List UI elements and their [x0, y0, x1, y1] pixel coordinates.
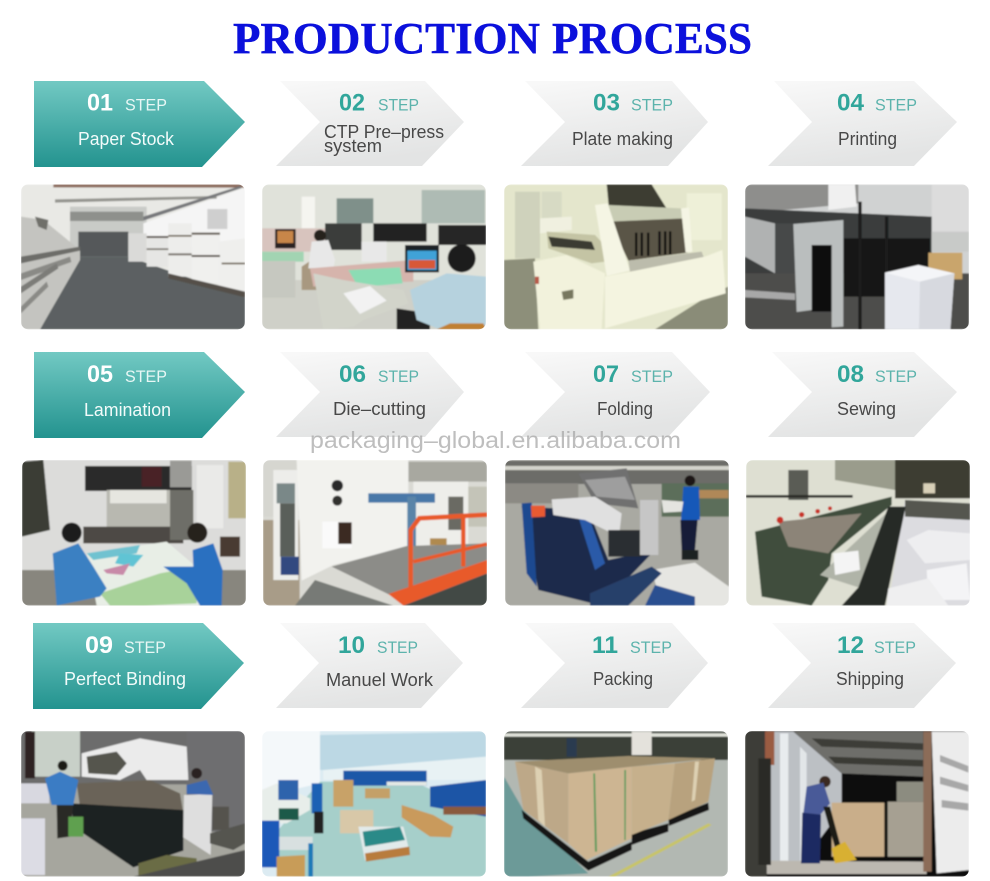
step 08 arrow: STEP	[875, 367, 917, 386]
step 01 arrow: STEP	[125, 96, 167, 114]
step 01 arrow: 01	[87, 90, 113, 116]
photo 02: CTP pre-press room	[262, 184, 486, 329]
step 03 arrow: STEP	[631, 96, 673, 114]
step 04 arrow	[768, 81, 957, 166]
step 01 arrow	[34, 81, 245, 167]
step 10 arrow: Manuel Work	[326, 670, 434, 690]
photo 09: perfect binding	[21, 731, 245, 877]
step 03 arrow	[521, 81, 708, 166]
photo 12: loading container	[745, 731, 969, 877]
step 11 arrow: 11	[592, 632, 618, 659]
photo 07: folding machine	[505, 460, 729, 606]
step 09 arrow: 09	[85, 632, 113, 659]
step 07 arrow	[521, 352, 710, 437]
photo 05: lamination	[22, 460, 246, 606]
step 08 arrow	[768, 352, 957, 437]
step 10 arrow: STEP	[377, 638, 418, 657]
step 06 arrow	[276, 352, 464, 437]
photo 04: printing press	[745, 184, 969, 329]
step 05 arrow: 05	[87, 361, 113, 388]
step 12 arrow	[768, 623, 956, 708]
step 06 arrow: Die–cutting	[333, 399, 426, 419]
step 10 arrow	[276, 623, 463, 708]
step 07 arrow: STEP	[631, 367, 673, 386]
photo 08: sewing line	[746, 460, 970, 606]
step 11 arrow: STEP	[630, 638, 672, 657]
photo 06: die-cutting	[263, 460, 487, 606]
step 07 arrow: Folding	[597, 399, 653, 419]
photo 11: packed pallets	[504, 731, 728, 877]
step 05 arrow: STEP	[125, 367, 167, 386]
step 05 arrow: Lamination	[84, 400, 171, 420]
title: PRODUCTION	[233, 14, 540, 63]
step 05 arrow	[34, 352, 245, 438]
step 06 arrow: 06	[339, 361, 366, 388]
step 02 arrow: STEP	[378, 96, 419, 114]
step 09 arrow: Perfect Binding	[64, 669, 186, 689]
step 03 arrow: 03	[593, 90, 620, 116]
step 12 arrow: Shipping	[836, 669, 904, 689]
step 02 arrow: 02	[339, 90, 365, 116]
photo 10: manual work hall	[262, 731, 486, 877]
title: PROCESS	[552, 14, 752, 63]
step 09 arrow	[33, 623, 244, 709]
step 01 arrow: Paper Stock	[78, 129, 175, 149]
step 02 arrow	[276, 81, 464, 166]
watermark: packaging–global.en.alibaba.com	[310, 427, 681, 453]
step 12 arrow: STEP	[874, 638, 916, 657]
step 04 arrow: 04	[837, 90, 865, 116]
step 02 arrow: CTP Pre–press	[324, 122, 444, 142]
step 09 arrow: STEP	[124, 638, 166, 657]
photo 03: plate making machine	[504, 184, 728, 329]
step 04 arrow: STEP	[875, 96, 917, 114]
step 03 arrow: Plate making	[572, 129, 673, 149]
step 10 arrow: 10	[338, 632, 365, 659]
title	[233, 14, 752, 63]
step 12 arrow: 12	[837, 632, 864, 659]
step 02 arrow: system	[324, 136, 382, 156]
step 04 arrow: Printing	[838, 129, 897, 149]
step 07 arrow: 07	[593, 361, 619, 388]
photo 01: paper stock warehouse	[21, 184, 245, 329]
step 11 arrow	[521, 623, 708, 708]
step 08 arrow: 08	[837, 361, 864, 388]
step 06 arrow: STEP	[378, 367, 419, 386]
step 08 arrow: Sewing	[837, 399, 896, 419]
step 11 arrow: Packing	[593, 669, 653, 689]
